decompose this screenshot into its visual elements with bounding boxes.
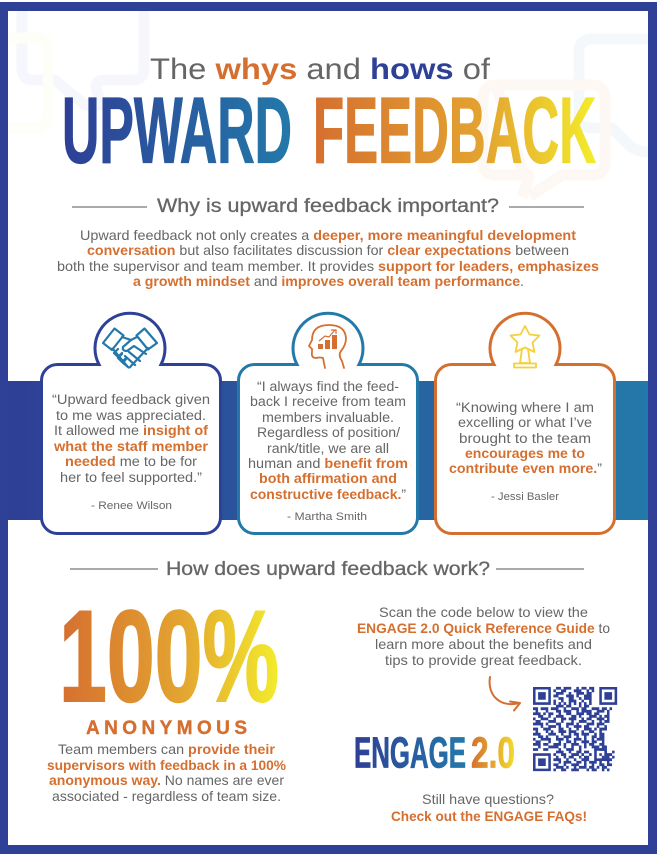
background speech bubbles xyxy=(8,11,648,197)
panel: quote card Renee Wilson xyxy=(42,313,220,534)
intro paragraph xyxy=(57,227,599,289)
attribution: - Renee Wilson xyxy=(91,500,172,512)
intro paragraph: Upward feedback not only creates a deeper, more meaningful development xyxy=(80,227,576,243)
quote text: encourages me to xyxy=(465,446,585,461)
QR code xyxy=(533,687,617,771)
closing call to action xyxy=(391,791,587,824)
section heading: how: How does upward feedback work? xyxy=(166,559,490,580)
quote text: human and benefit from xyxy=(248,456,408,471)
closing call to action: Check out the ENGAGE FAQs! xyxy=(391,808,587,824)
panel: quote card Jessi Basler xyxy=(436,313,614,534)
description: anonymous way. No names are ever xyxy=(49,772,284,788)
quote text: excelling or what I’ve xyxy=(458,415,592,430)
gradient band xyxy=(8,381,648,520)
quote text: rank/title, we are all xyxy=(267,441,389,456)
icon: handshake xyxy=(103,328,157,368)
panel: quote card Martha Smith xyxy=(238,313,418,534)
quote text: “Knowing where I am xyxy=(456,400,594,415)
icon: star trophy xyxy=(510,326,540,368)
intro paragraph: both the supervisor and team member. It provides support for leaders, emphasizes xyxy=(57,258,599,274)
quote text xyxy=(248,379,408,502)
description: Team members can provide their xyxy=(58,741,276,757)
intro paragraph: a growth mindset and improves overall team performance. xyxy=(133,273,524,289)
scan instructions: tips to provide great feedback. xyxy=(385,652,582,668)
quote text: needed me to be for xyxy=(65,454,198,469)
logo: ENGAGE 2.0: 2.0 xyxy=(471,728,515,778)
description xyxy=(47,741,287,804)
quote text: brought to the team xyxy=(459,431,591,446)
quote text: both affirmation and xyxy=(259,471,397,486)
description: associated - regardless of team size. xyxy=(52,788,281,804)
big number: 100% xyxy=(59,583,279,729)
quote text: what the staff member xyxy=(53,439,209,454)
anonymous label: ANONYMOUS xyxy=(86,718,247,739)
quote text: “Upward feedback given xyxy=(52,392,210,407)
description: supervisors with feedback in a 100% xyxy=(47,757,287,773)
logo: ENGAGE 2.0: ENGAGE xyxy=(354,728,466,778)
scan instructions: learn more about the benefits and xyxy=(375,636,592,652)
scan instructions: ENGAGE 2.0 Quick Reference Guide to xyxy=(357,620,610,636)
quote text: back I receive from team xyxy=(250,394,406,409)
title: the whys and hows of: The whys and hows of xyxy=(150,53,491,86)
quote text: It allowed me insight of xyxy=(54,423,209,438)
arrow to QR code xyxy=(490,677,520,710)
quote text: Regardless of position/ xyxy=(257,425,400,440)
quote text xyxy=(52,392,210,485)
attribution: - Martha Smith xyxy=(287,511,367,523)
attribution: - Jessi Basler xyxy=(491,491,559,503)
stat: 100% anonymous xyxy=(47,583,287,804)
quote text: constructive feedback. ” xyxy=(250,487,406,502)
scan instructions: Scan the code below to view the xyxy=(379,604,588,620)
quote text xyxy=(449,400,602,476)
quote text: members invaluable. xyxy=(262,410,394,425)
quote text: contribute even more. ” xyxy=(449,461,602,476)
section heading: why: Why is upward feedback important? xyxy=(157,196,499,217)
quote text: to me was appreciated. xyxy=(56,408,206,423)
scan instructions xyxy=(357,604,610,668)
quote text: her to feel supported.” xyxy=(60,470,202,485)
intro paragraph: conversation but also facilitates discussion for clear expectations between xyxy=(87,242,569,258)
quote text: “I always find the feed- xyxy=(257,379,399,394)
icon: head with chart xyxy=(309,325,346,368)
closing call to action: Still have questions? xyxy=(422,791,554,807)
title: upward: UPWARD xyxy=(62,78,292,182)
title xyxy=(62,53,596,182)
